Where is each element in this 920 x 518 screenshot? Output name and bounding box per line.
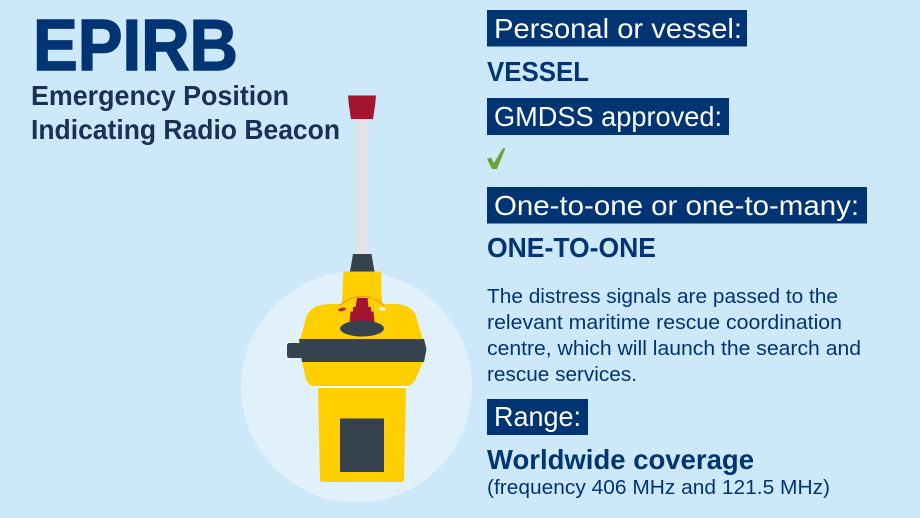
description text: relevant maritime rescue coordination bbox=[487, 312, 842, 334]
beacon backdrop circle bbox=[241, 272, 472, 502]
title: EPIRB bbox=[33, 6, 238, 86]
subtitle: Indicating Radio Beacon bbox=[31, 114, 340, 145]
answer: one-to-one: ONE-TO-ONE bbox=[487, 232, 656, 263]
side handle bbox=[287, 343, 303, 358]
antenna bbox=[356, 119, 368, 256]
subtitle: Emergency Position bbox=[31, 80, 289, 111]
description text: rescue services. bbox=[487, 364, 637, 386]
dark window bbox=[340, 418, 384, 472]
icon: green check mark bbox=[487, 148, 506, 169]
antenna red cap bbox=[348, 96, 376, 119]
red activation button bbox=[350, 298, 374, 322]
answer: vessel: VESSEL bbox=[487, 56, 589, 87]
heading: GMDSS approved: GMDSS approved: bbox=[494, 101, 722, 132]
heading: personal or vessel: Personal or vessel: bbox=[494, 13, 742, 44]
dark band bbox=[299, 339, 426, 362]
description text: The distress signals are passed to the bbox=[487, 286, 838, 308]
dark button base bbox=[340, 320, 384, 336]
antenna black collar bbox=[350, 254, 374, 272]
red indicator light bbox=[338, 307, 346, 312]
illustration: EPIRB beacon bbox=[241, 96, 472, 502]
description text bbox=[487, 286, 861, 386]
upper yellow body bbox=[300, 304, 423, 386]
heading: one-to-one or one-to-many: One-to-one or one-to-many: bbox=[494, 190, 859, 221]
frequency note: (frequency 406 MHz and 121.5 MHz) bbox=[487, 477, 830, 499]
white gap line bbox=[317, 386, 408, 388]
yellow neck bbox=[342, 272, 382, 310]
subtitle bbox=[31, 80, 340, 145]
description text: centre, which will launch the search and bbox=[487, 338, 861, 360]
orange arc bbox=[340, 296, 384, 305]
yellow base bbox=[318, 388, 406, 482]
heading: range: Range: bbox=[494, 401, 581, 432]
answer: worldwide coverage: Worldwide coverage bbox=[487, 444, 754, 475]
white indicator light bbox=[379, 307, 386, 311]
